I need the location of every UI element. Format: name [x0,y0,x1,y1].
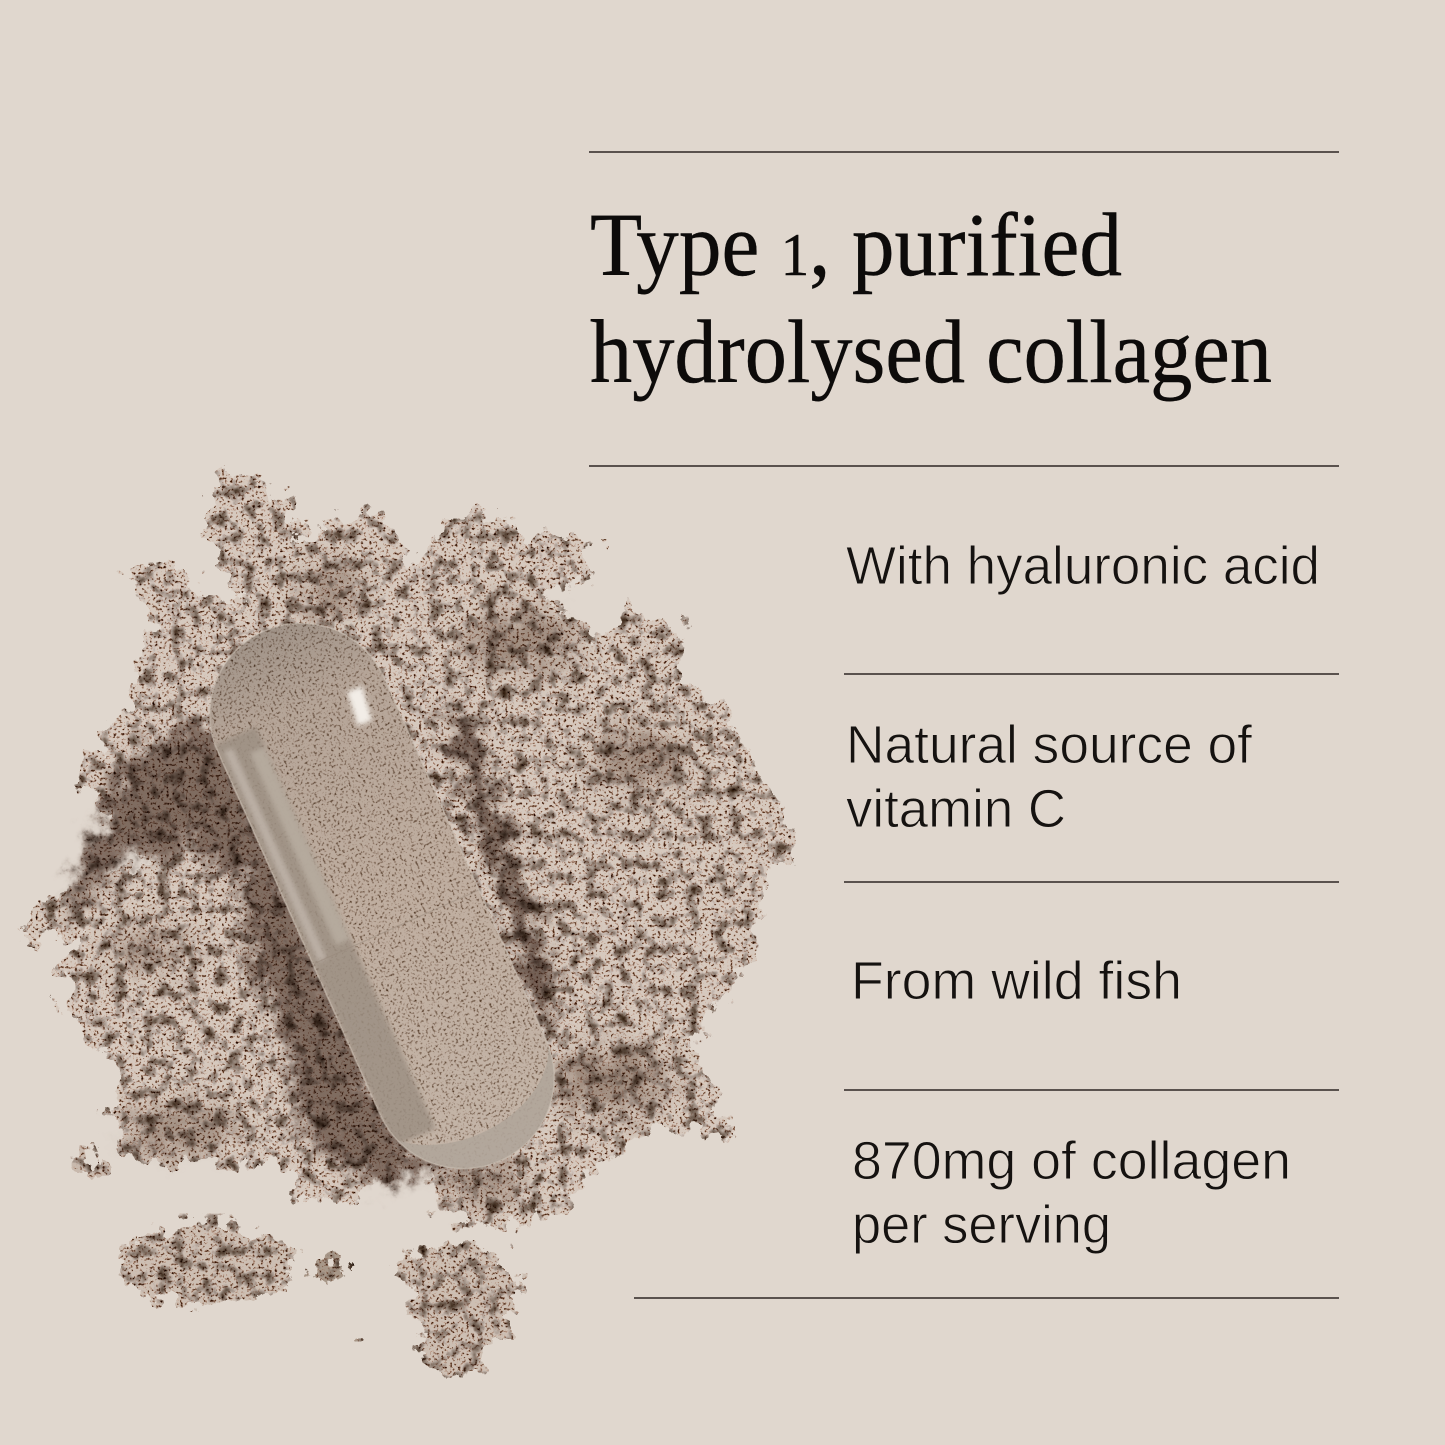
feature: wild fish: From wild fish [851,951,1182,1011]
powder chunk: bottom centre [398,1245,518,1375]
infographic canvas [18,151,1339,1378]
feature: collagen per serving: 870mg of collagen [852,1131,1291,1191]
heading line 1: Type 1, purified [590,196,1122,295]
dark shaded powder [60,715,440,1190]
crevice along capsule [440,700,560,1030]
capsule glare [347,686,372,726]
capsule outline [181,594,583,1198]
powder chunk: small crumbs [73,1147,368,1347]
feature: vitamin C: Natural source of [846,715,1253,775]
feature list [846,536,1320,1255]
powder pile [22,462,800,1235]
feature: collagen per serving: per serving [852,1195,1111,1255]
feature: collagen per serving [852,1131,1291,1255]
capsule contents [181,594,583,1198]
feature: hyaluronic acid: With hyaluronic acid [846,536,1320,596]
feature: vitamin C [846,715,1253,839]
capsule seam [315,890,479,963]
shadow blotches on powder [110,568,685,1202]
translucent shell band [215,671,583,1198]
heading [590,196,1272,402]
powder pile with capsule [22,462,800,1375]
heading line 2: hydrolysed collagen [590,303,1272,402]
capsule [209,622,555,1170]
powder chunk: bottom left [120,1222,290,1306]
feature: vitamin C: vitamin C [846,779,1066,839]
